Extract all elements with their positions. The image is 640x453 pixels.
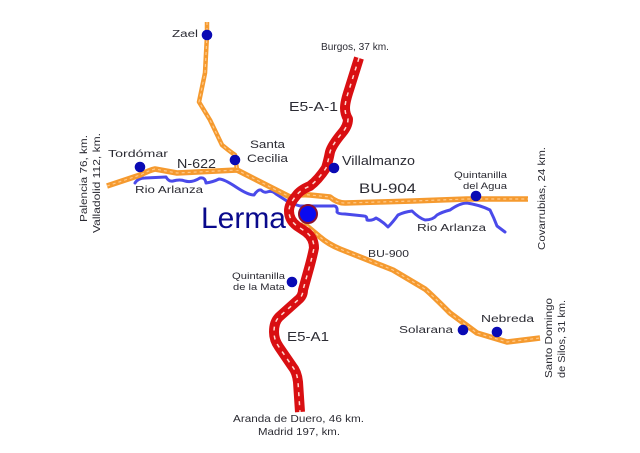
city marker: Lerma: [299, 205, 317, 223]
marker: Tordómar: [135, 162, 145, 172]
river: Rio Arlanza: [135, 177, 505, 232]
label: Palencia and Valladolid distance: Valladolid 112, km.: [91, 133, 103, 233]
marker: Nebreda: [492, 327, 502, 337]
label: Villalmanzo: Villalmanzo: [342, 154, 415, 168]
road: N-622 and BU-904: [107, 169, 528, 203]
label: Burgos distance: Burgos, 37 km.: [321, 42, 389, 53]
marker: Villalmanzo: [329, 163, 339, 173]
marker: Quintanilla de la Mata: [287, 277, 297, 287]
heading: Lerma: Lerma: [201, 202, 286, 235]
label: Tordómar: Tordómar: [108, 148, 169, 160]
label: BU-900: BU-900: [368, 249, 410, 260]
label: Santo Domingo de Silos distance: de Silos, 31 km.: [556, 300, 568, 378]
label: Palencia and Valladolid distance: [78, 133, 103, 233]
label: Quintanilla del Agua: del Agua: [463, 181, 508, 192]
marker: Quintanilla del Agua: [471, 191, 481, 201]
label: Solarana: Solarana: [399, 325, 454, 336]
label: Aranda and Madrid distance: Aranda de Duero, 46 km.: [233, 413, 364, 425]
label: Santo Domingo de Silos distance: [543, 298, 568, 378]
label: Rio Arlanza west: Rio Arlanza: [135, 185, 204, 196]
label: Quintanilla del Agua: Quintanilla: [454, 170, 508, 181]
label: E5-A-1: E5-A-1: [289, 99, 338, 114]
label: Rio Arlanza east: Rio Arlanza: [417, 223, 487, 234]
label: N-622: N-622: [177, 157, 216, 171]
label: Nebreda: Nebreda: [481, 314, 535, 325]
marker: Santa Cecilia: [230, 155, 240, 165]
road: Zael to Santa Cecilia: [199, 22, 237, 170]
label: Zael: Zael: [172, 29, 198, 40]
label: Santa Cecilia: Cecilia: [247, 153, 289, 165]
label: Palencia and Valladolid distance: Palencia 76, km.: [78, 135, 90, 222]
label: E5-A1: E5-A1: [287, 329, 329, 344]
marker: Solarana: [458, 325, 468, 335]
label: BU-904: BU-904: [359, 180, 416, 196]
label: Santa Cecilia: Santa: [250, 139, 286, 151]
label: Covarrubias distance: Covarrubias, 24 km.: [536, 147, 548, 250]
label: Santo Domingo de Silos distance: Santo Domingo: [543, 298, 555, 378]
road: BU-900: [302, 222, 540, 342]
motorway: E5-A-1 and E5-A1: [274, 58, 359, 412]
label: Aranda and Madrid distance: Madrid 197, km.: [258, 426, 340, 438]
label: Quintanilla de la Mata: de la Mata: [233, 282, 286, 293]
label: Quintanilla de la Mata: Quintanilla: [232, 271, 286, 282]
marker: Zael: [202, 30, 212, 40]
